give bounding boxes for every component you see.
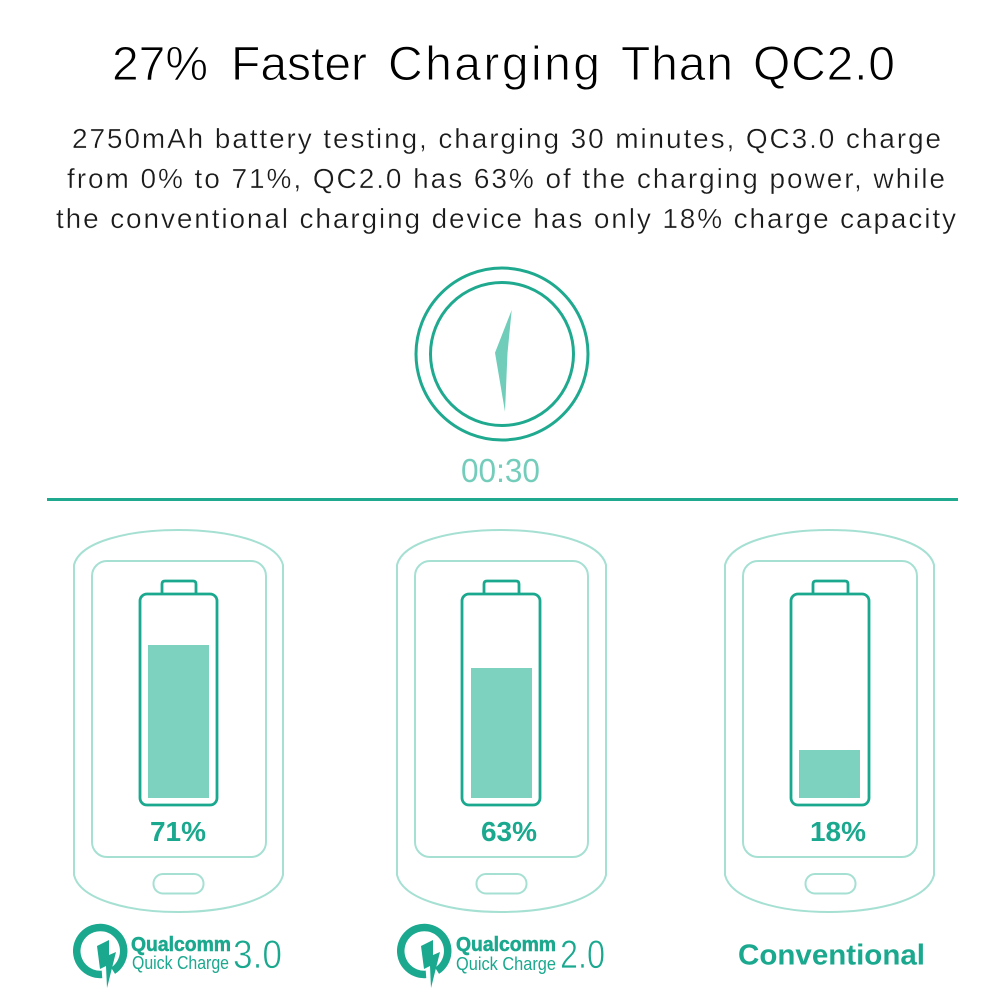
description text: from 0% to 71%, QC2.0 has 63% of the charging power, while bbox=[67, 163, 945, 194]
logo: Qualcomm Quick Charge 3.0: Quick Charge bbox=[132, 953, 229, 973]
logo: Qualcomm Quick Charge 2.0: 2.0 bbox=[560, 933, 605, 977]
icon: clock bbox=[416, 268, 588, 440]
phone: Conventional bbox=[725, 530, 934, 912]
title: Than bbox=[621, 38, 733, 91]
phone: Quick Charge 2.0 bbox=[397, 530, 606, 912]
logo: Qualcomm Quick Charge 2.0: Quick Charge bbox=[456, 954, 556, 974]
timer label: 00:30 bbox=[461, 452, 540, 489]
description text bbox=[56, 123, 956, 234]
description text: 2750mAh battery testing, charging 30 minutes, QC3.0 charge bbox=[72, 123, 941, 154]
ring and bolt bbox=[77, 927, 124, 988]
logo: Qualcomm Quick Charge 2.0 bbox=[401, 927, 605, 988]
percentage 63%: 63% bbox=[481, 816, 537, 847]
battery 63% bbox=[462, 581, 540, 805]
logo: Qualcomm Quick Charge 3.0: Qualcomm bbox=[131, 934, 231, 956]
phone: Quick Charge 3.0 bbox=[74, 530, 283, 912]
battery 18% bbox=[791, 581, 869, 805]
title: Faster bbox=[231, 38, 367, 91]
title bbox=[112, 38, 895, 91]
logo: Qualcomm Quick Charge 3.0 bbox=[77, 927, 282, 988]
logo: Qualcomm Quick Charge 2.0: Qualcomm bbox=[456, 934, 556, 956]
logo: Qualcomm Quick Charge 3.0: 3.0 bbox=[233, 933, 282, 977]
description text: the conventional charging device has only 18% charge capacity bbox=[56, 203, 956, 234]
ring and bolt bbox=[401, 927, 448, 988]
label: Conventional: Conventional bbox=[738, 940, 925, 972]
title: Charging bbox=[388, 38, 600, 91]
title: QC2.0 bbox=[753, 38, 895, 91]
percentage 18%: 18% bbox=[810, 816, 866, 847]
title: 27% bbox=[112, 38, 208, 91]
divider line bbox=[47, 498, 958, 501]
percentage 71%: 71% bbox=[150, 816, 206, 847]
battery 71% bbox=[140, 581, 217, 805]
